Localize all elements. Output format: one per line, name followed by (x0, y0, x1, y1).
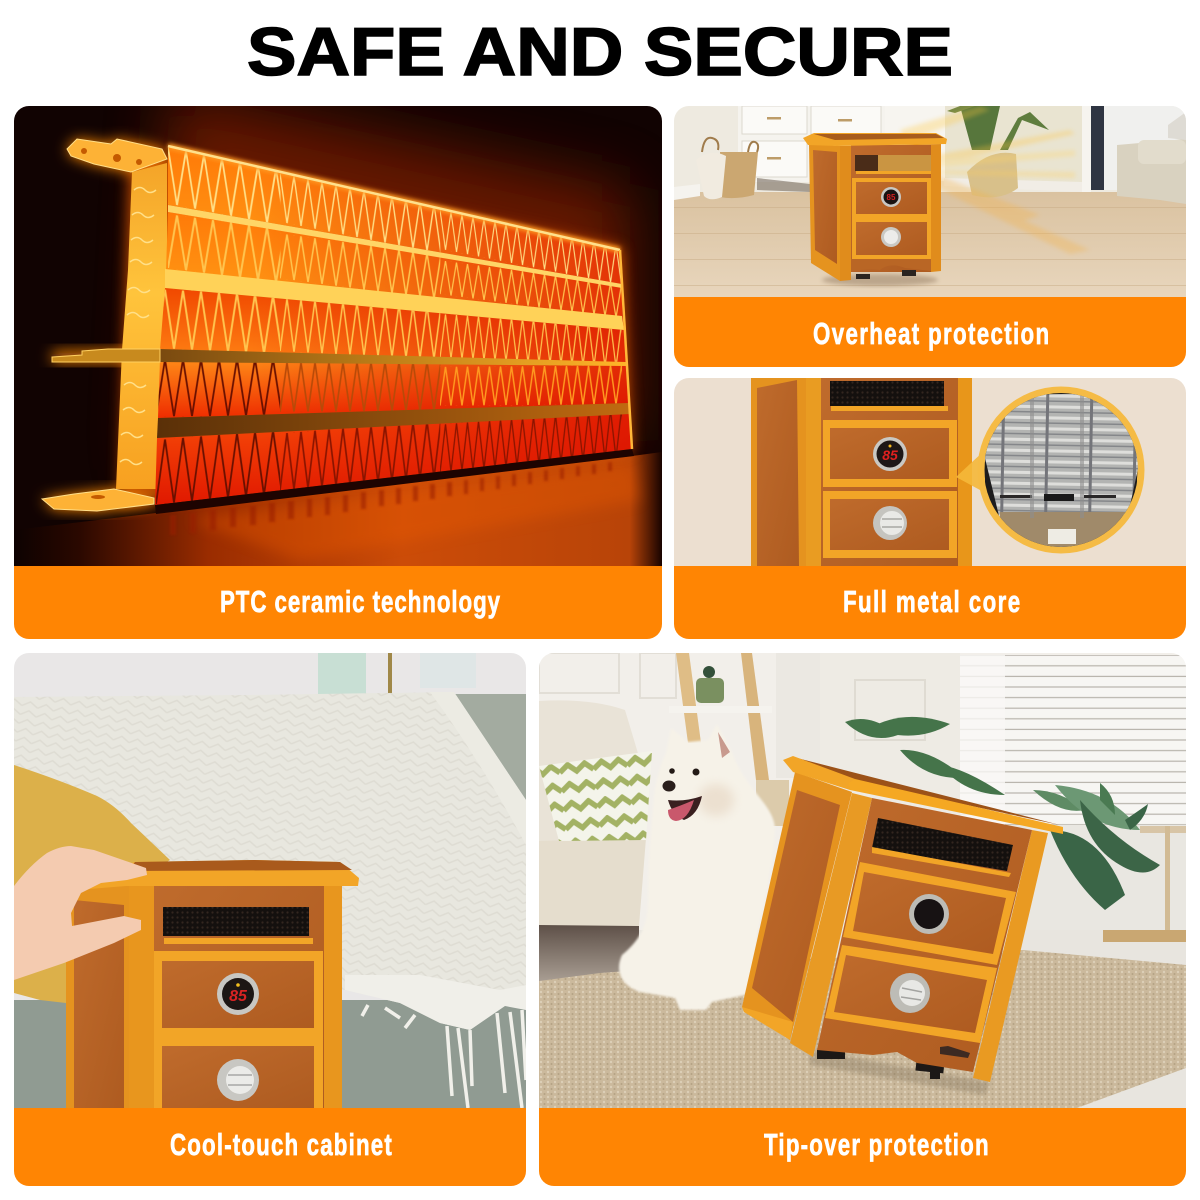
front (790, 793, 872, 1057)
drawer 1 (154, 951, 323, 1038)
drawer 1: 85 (229, 988, 248, 1005)
caption band (539, 1108, 1186, 1186)
hand (14, 846, 147, 980)
sofa and pillow (539, 700, 652, 926)
drawer 1 (843, 862, 1016, 965)
caption band (674, 566, 1186, 639)
basket (696, 138, 758, 199)
panel: Cool-touch cabinet (14, 653, 526, 1186)
heater element glow (120, 150, 632, 505)
side scale panel (42, 139, 167, 511)
drawer 1 (823, 420, 957, 487)
caption band (14, 566, 662, 639)
side panel (742, 772, 852, 1040)
logo (940, 1046, 970, 1058)
panel: Tip-over protection (539, 653, 1186, 1186)
vent (163, 907, 313, 944)
tilted heater (742, 756, 1063, 1095)
heater: 85 (887, 193, 896, 202)
vent with glow (855, 155, 931, 174)
panel: Overheat protection (674, 106, 1186, 367)
title: SAFE AND SECURE (247, 14, 953, 90)
yellow pillow (14, 765, 170, 1003)
ladder shelf (669, 653, 789, 826)
heater (803, 133, 947, 286)
background wall and sofa (14, 653, 526, 1108)
ceramic bars (155, 146, 634, 514)
blanket (14, 692, 526, 1108)
heat rays (900, 106, 1090, 254)
heater (66, 860, 359, 1108)
caption band (14, 1108, 526, 1186)
wheels (817, 1050, 945, 1079)
heater close-up (751, 378, 972, 566)
room background (674, 106, 1186, 297)
terminal tabs (42, 139, 167, 511)
room background (539, 653, 1186, 1108)
caption band: Tip-over protection (764, 1127, 989, 1162)
caption band: Cool-touch cabinet (170, 1127, 392, 1162)
vent (830, 381, 948, 411)
drawer 1: 85 (882, 447, 898, 463)
drawer 2 (823, 491, 957, 558)
rug (539, 950, 1186, 1108)
drawer 2 (825, 945, 997, 1043)
panel: Full metal core (674, 378, 1186, 639)
sofa (1117, 112, 1186, 204)
potted plant (947, 106, 1049, 197)
caption band (674, 297, 1186, 367)
drawer 2 (154, 1037, 323, 1108)
lid (783, 756, 1063, 834)
caption band: PTC ceramic technology (220, 584, 500, 619)
ceramic rows (155, 146, 632, 505)
plant (845, 717, 1160, 910)
callout pointer (956, 456, 980, 490)
caption band: Full metal core (843, 584, 1020, 619)
metal core magnifier (981, 390, 1142, 550)
floor glow (14, 452, 662, 566)
caption band: Overheat protection (813, 316, 1049, 351)
panel: PTC ceramic technology (14, 90, 662, 639)
dog (619, 724, 775, 1010)
vent (872, 818, 1013, 877)
